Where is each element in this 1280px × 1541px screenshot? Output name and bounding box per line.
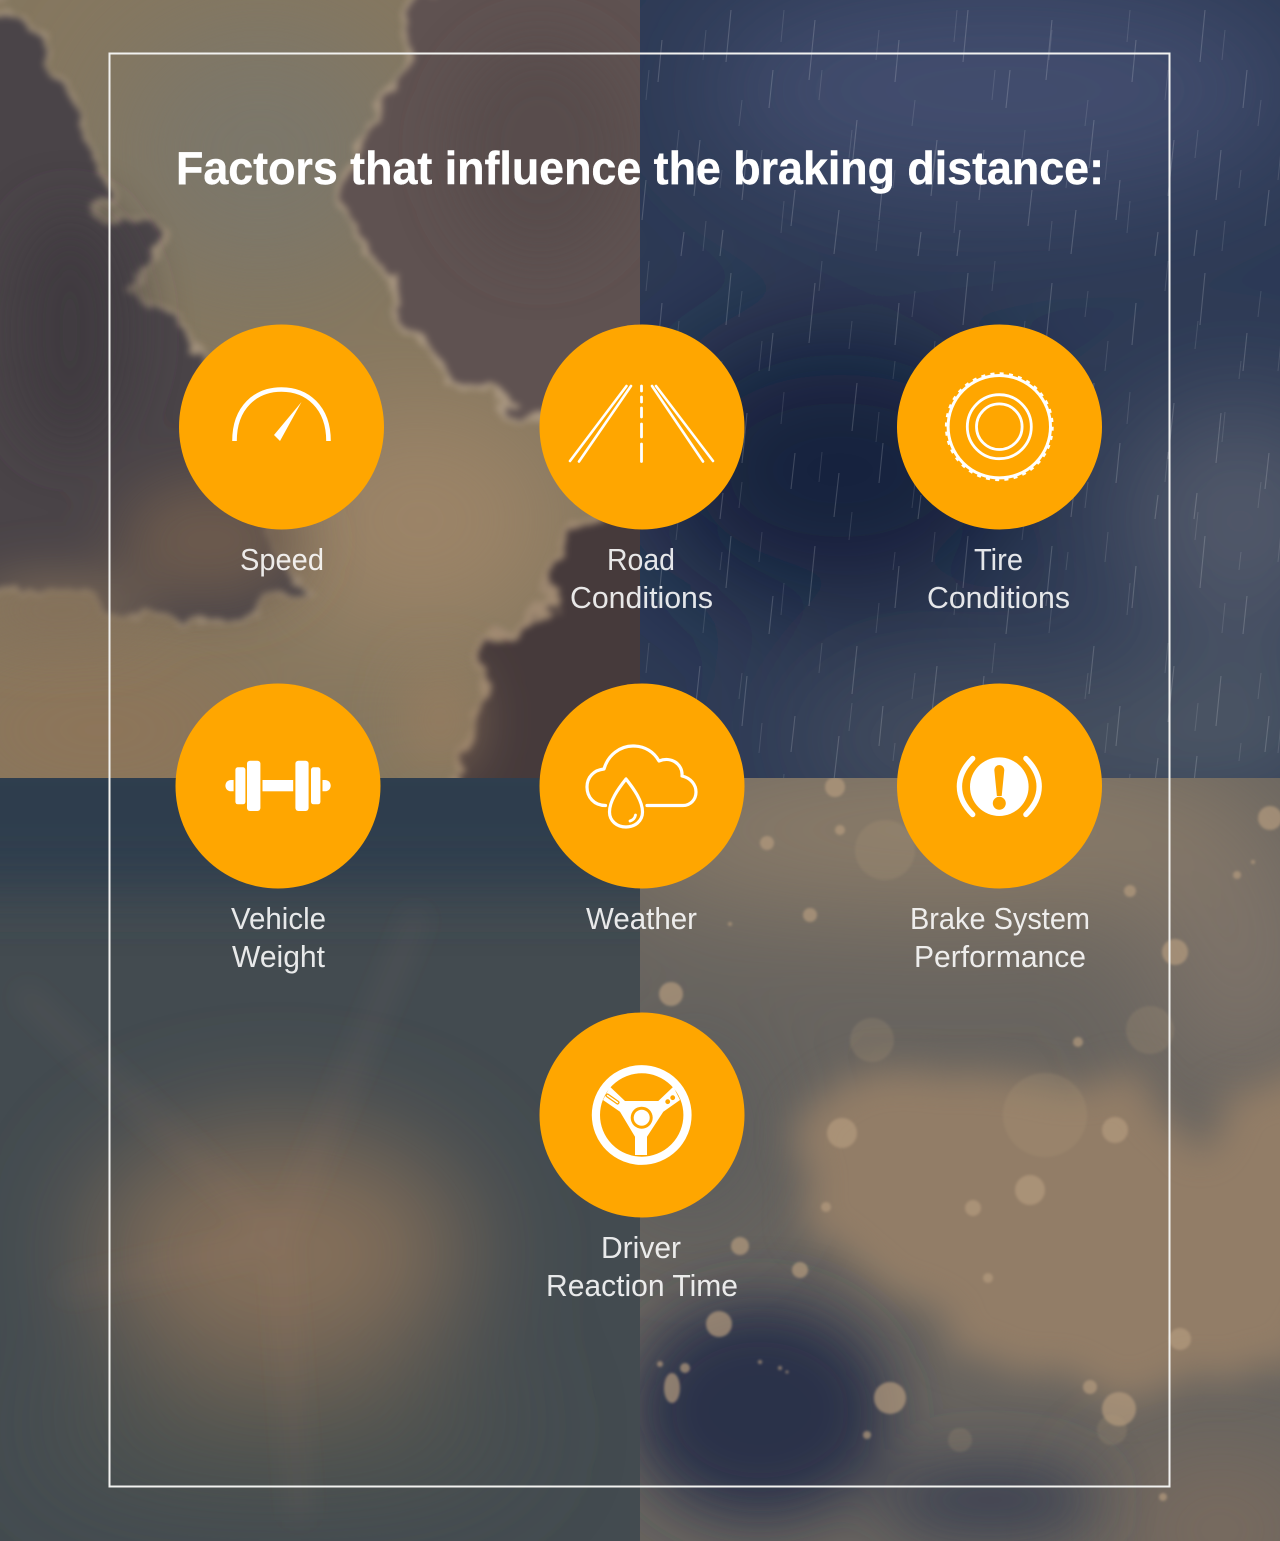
label: Road <box>607 542 675 577</box>
label: Vehicle <box>231 901 326 936</box>
factor: brake system performance <box>897 684 1102 974</box>
photo: sun rays, bottom left <box>0 778 640 1541</box>
photo: dust and clouds, bottom right <box>600 750 1280 1541</box>
frame <box>110 54 1170 1486</box>
label: Conditions <box>570 580 713 615</box>
label: Weather <box>586 901 697 936</box>
badge <box>540 324 744 530</box>
label: Performance <box>914 939 1086 974</box>
label <box>927 542 1070 615</box>
icon: dumbbell <box>225 761 331 811</box>
badge <box>540 1012 744 1218</box>
factor: driver reaction time <box>540 1012 744 1303</box>
label: Brake System <box>910 901 1090 936</box>
factor: weather <box>540 684 744 936</box>
label: Speed <box>240 542 324 577</box>
title: Factors that influence the braking distance: <box>176 142 1104 194</box>
label: Weight <box>232 939 325 974</box>
icon: road <box>570 386 713 462</box>
icon: tire <box>946 374 1052 480</box>
icon: speedometer <box>234 390 328 441</box>
badge <box>897 684 1102 888</box>
label <box>231 901 326 974</box>
label: Conditions <box>927 580 1070 615</box>
cloud: lower right bank <box>451 517 640 778</box>
icon: brake warning <box>959 757 1039 816</box>
label: Reaction Time <box>546 1268 738 1303</box>
label: Driver <box>601 1230 681 1265</box>
bokeh particles <box>657 777 1280 1501</box>
label <box>910 901 1090 974</box>
label: Tire <box>974 542 1023 577</box>
badge <box>179 324 384 530</box>
badge <box>176 684 380 888</box>
photo: sunset clouds, top left <box>0 0 640 778</box>
photo: rain clouds, top right <box>640 0 1280 800</box>
icon: cloud with drop <box>587 746 696 827</box>
label <box>546 1230 738 1303</box>
factor: tire conditions <box>897 324 1102 615</box>
cloud: upper centre bank <box>334 0 640 424</box>
cloud: billow <box>800 1065 1280 1400</box>
badge <box>540 684 744 888</box>
cloud: left bank <box>0 0 310 640</box>
factor: road conditions <box>540 324 744 615</box>
badge <box>897 324 1102 530</box>
label <box>570 542 713 615</box>
factor: speed <box>179 324 384 577</box>
icon: steering wheel <box>596 1069 688 1161</box>
factor: vehicle weight <box>176 684 380 974</box>
